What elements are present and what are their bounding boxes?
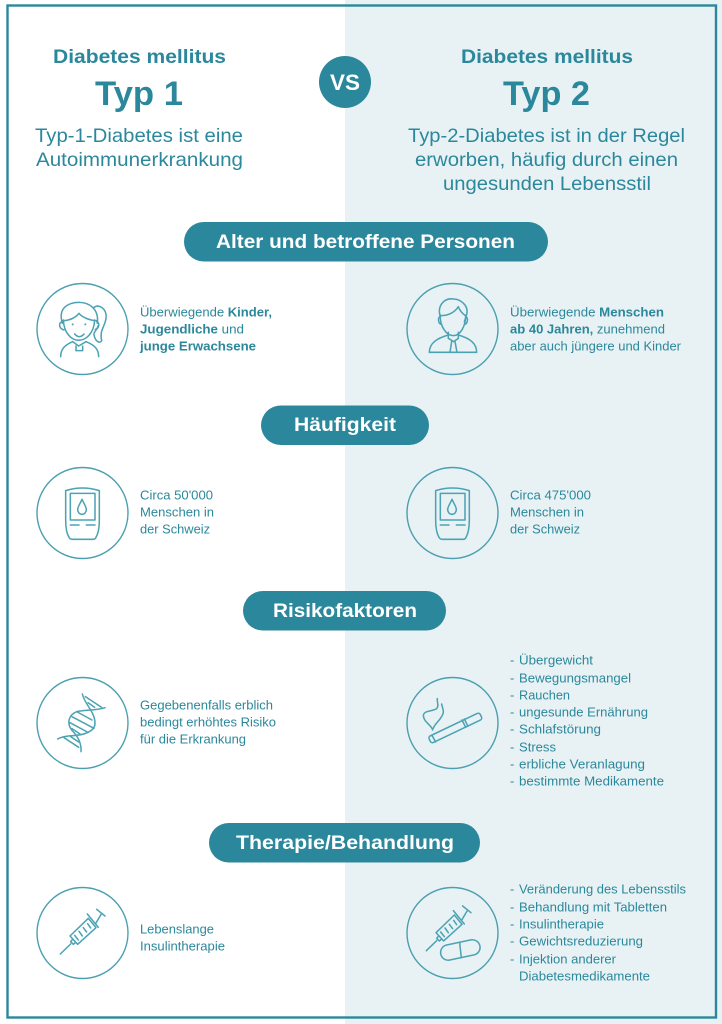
list: therapies type 2: Insulintherapie [519,917,604,932]
heading pill: therapie/behandlung: Therapie/Behandlung [236,832,454,854]
heading: diabetes mellitus right: Diabetes mellitus [461,47,633,68]
text: type 2 description: ungesunden Lebensstil [443,173,651,195]
text: type 2 description [408,125,685,195]
text: age type 2: Überwiegende Menschen [510,304,664,320]
icon: glucose meter left [37,468,128,558]
icon: glucose meter right [407,468,498,558]
text: risk type 1: bedingt erhöhtes Risiko [140,714,276,730]
text: type 1 description [35,125,243,171]
list: therapies type 2 [510,882,686,984]
panel: right column background [345,0,722,1024]
heading: typ 1: Typ 1 [95,75,183,113]
icon: syringe [37,888,128,978]
text: frequency type 2: Menschen in [510,504,584,520]
list: risk factors type 2 [510,653,664,789]
list: risk factors type 2: - [510,705,514,720]
badge: vs: VS [330,70,360,95]
text: risk type 1 [140,698,276,746]
text: frequency type 1: Menschen in [140,504,214,520]
text: therapy type 1: Insulintherapie [140,938,225,954]
text: therapy type 1 [140,922,225,954]
list: risk factors type 2: Rauchen [519,688,570,703]
text: risk type 1: für die Erkrankung [140,732,246,746]
text: frequency type 2: Circa 475'000 [510,488,591,502]
list: risk factors type 2: - [510,722,514,737]
list: risk factors type 2: - [510,740,514,755]
icon: dna [37,678,128,768]
text: age type 1: Überwiegende Kinder, [140,304,272,320]
text: risk type 1: Gegebenenfalls erblich [140,698,273,712]
heading pill: alter und betroffene personen [184,222,548,262]
list: risk factors type 2: ungesunde Ernährung [519,705,648,720]
list: risk factors type 2: bestimmte Medikamente [519,774,664,789]
text: frequency type 1: der Schweiz [140,522,210,536]
text: age type 1: junge Erwachsene [139,338,256,354]
list: risk factors type 2: - [510,757,514,772]
icon: girl [37,284,128,374]
text: therapy type 1: Lebenslange [140,922,214,936]
text: type 1 description: Autoimmunerkrankung [36,149,243,171]
text: type 1 description: Typ-1-Diabetes ist eine [35,125,243,147]
list: risk factors type 2: - [510,653,514,668]
list: therapies type 2: Diabetesmedikamente [519,969,650,984]
icon: adult man [407,284,498,374]
heading pill: risikofaktoren [243,591,446,630]
heading pill: alter und betroffene personen: Alter und betroffene Personen [216,231,515,253]
list: risk factors type 2: - [510,688,514,703]
list: therapies type 2: Gewichtsreduzierung [519,934,643,949]
text: age type 1: Jugendliche und [140,322,244,336]
list: risk factors type 2: - [510,774,514,789]
list: therapies type 2: - [510,934,514,949]
heading pill: risikofaktoren: Risikofaktoren [273,600,417,622]
list: therapies type 2: - [510,952,514,967]
text: frequency type 2 [510,488,591,536]
text: type 2 description: erworben, häufig durch einen [415,149,678,171]
list: risk factors type 2: - [510,671,514,686]
heading: typ 2: Typ 2 [503,75,590,113]
heading pill: häufigkeit [261,406,429,445]
text: type 2 description: Typ-2-Diabetes ist in der Regel [408,125,685,147]
header: type 2 [408,47,685,195]
list: therapies type 2: Veränderung des Lebensstils [519,882,686,897]
text: age type 2: aber auch jüngere und Kinder [510,338,682,354]
heading pill: therapie/behandlung [209,823,480,862]
badge: vs [319,56,371,108]
list: therapies type 2: - [510,900,514,915]
list: therapies type 2: Injektion anderer [519,952,617,967]
list: therapies type 2: - [510,882,514,897]
text: age type 1 [139,304,272,354]
icon: cigarette [407,678,498,768]
list: risk factors type 2: Stress [519,740,556,755]
list: therapies type 2: - [510,917,514,932]
header: type 1 [35,47,243,171]
list: risk factors type 2: erbliche Veranlagung [519,757,645,772]
text: frequency type 1: Circa 50'000 [140,488,213,502]
text: frequency type 1 [140,488,214,536]
text: frequency type 2: der Schweiz [510,522,580,536]
icon: syringe and pill [407,888,498,978]
list: risk factors type 2: Schlafstörung [519,722,601,737]
list: risk factors type 2: Bewegungsmangel [519,671,631,686]
text: age type 2 [510,304,682,354]
heading pill: häufigkeit: Häufigkeit [294,414,397,436]
list: risk factors type 2: Übergewicht [519,653,593,668]
list: therapies type 2: Behandlung mit Tabletten [519,900,667,915]
text: age type 2: ab 40 Jahren, zunehmend [510,322,665,336]
heading: diabetes mellitus left: Diabetes mellitus [53,47,226,68]
